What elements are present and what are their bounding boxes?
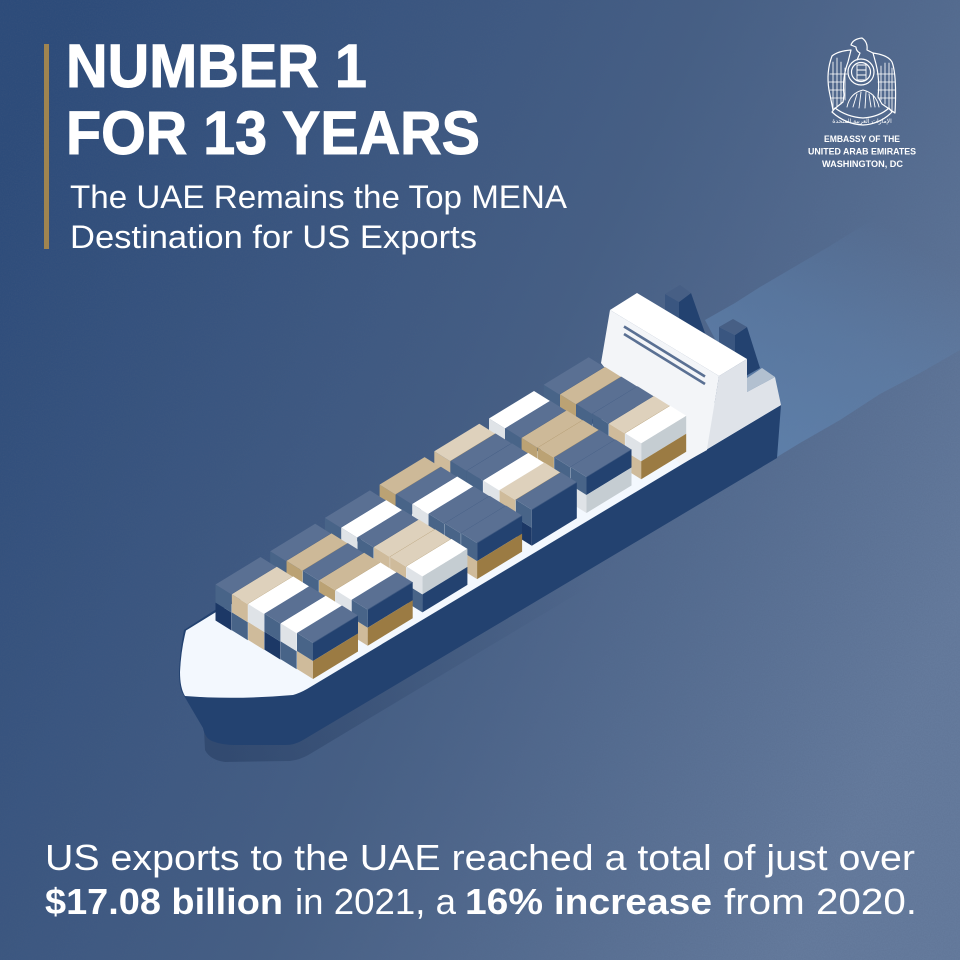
left wing [828,50,851,110]
embassy name: UNITED ARAB EMIRATES [808,146,916,156]
ship shadow [204,500,700,762]
ship wake [705,165,960,457]
accent bar [44,44,49,249]
containers bay 2 [270,524,413,646]
bottom statement: from 2020. [724,881,917,922]
containers bay 1 [216,557,358,679]
scroll with Arabic name: الإمارات العربية المتحدة [832,118,892,125]
bottom statement: $17.08 billion [45,881,283,922]
embassy name [808,134,916,169]
subtitle: Destination for US Exports [70,219,477,255]
icon: UAE emblem [828,38,896,125]
tail fan [847,90,879,108]
title: NUMBER 1 [66,32,367,100]
containers bay 4 [380,457,522,579]
eagle head and neck [851,38,873,60]
funnel rear right [719,319,760,382]
hull [179,395,781,745]
title [66,32,480,167]
bottom statement: in 2021, a [295,881,457,922]
right wing [873,53,896,113]
cargo ship [179,285,781,745]
subtitle [70,179,567,255]
containers bay 6 [489,391,632,513]
funnel rear left [665,285,705,345]
title: FOR 13 YEARS [66,99,480,167]
containers bay 5 [434,424,577,546]
medallion [848,59,874,85]
bottom statement: 16% increase [465,881,712,922]
embassy name: EMBASSY OF THE [824,134,900,144]
deck [180,400,781,698]
containers bay 3 [325,490,467,612]
subtitle: The UAE Remains the Top MENA [70,179,567,215]
embassy name: WASHINGTON, DC [822,159,903,169]
containers bay 7 [544,357,686,479]
bridge superstructure [601,293,781,465]
bottom statement: US exports to the UAE reached a total of just over [45,837,915,878]
bottom statement [45,837,917,922]
